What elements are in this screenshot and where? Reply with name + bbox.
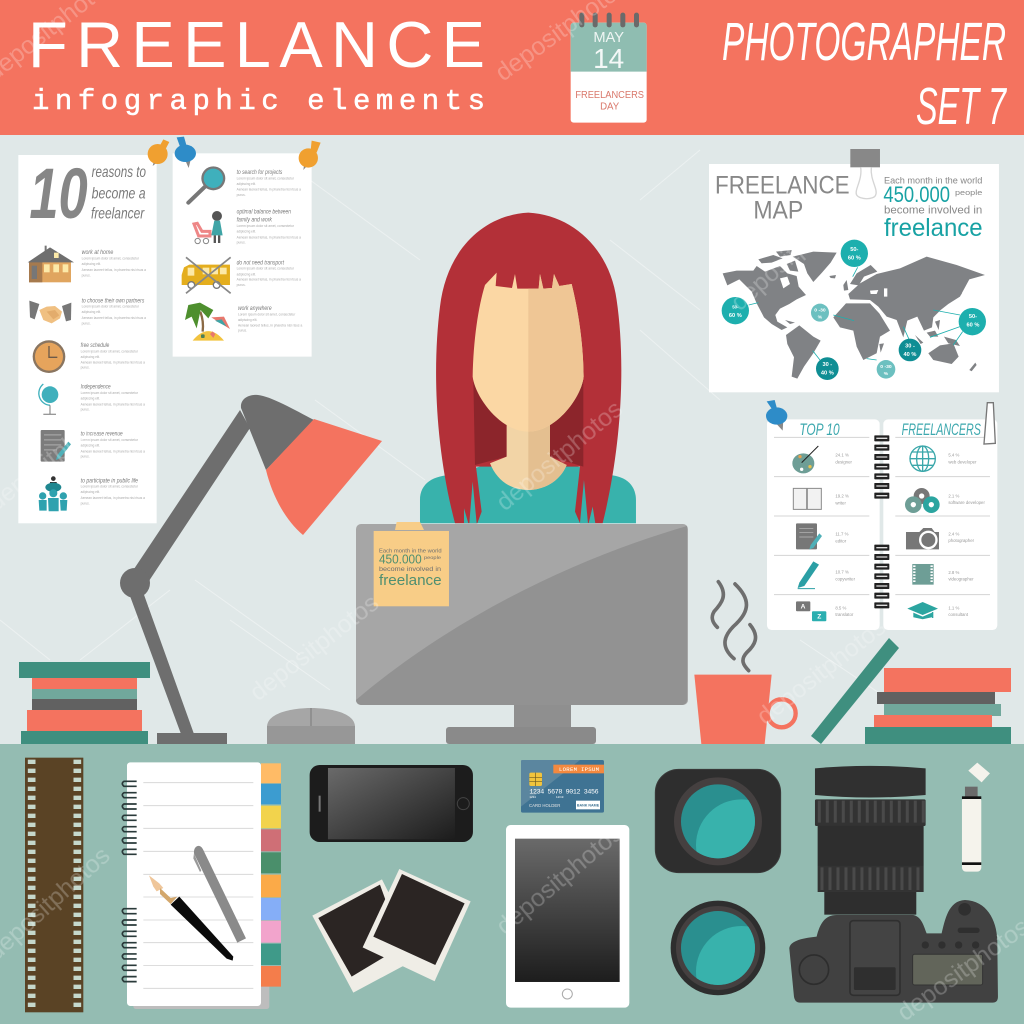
icon: palm island — [185, 303, 230, 341]
credit card: LOREM IPSUM — [559, 766, 600, 773]
desk lamp — [120, 395, 382, 745]
bubble: 50-60 west — [722, 297, 749, 324]
header banner — [0, 0, 1024, 136]
reason: work at home: Lorem ipsum dolor sit amet, consectetur — [82, 256, 140, 261]
reason: public life: purus. — [81, 500, 90, 505]
calendar icon: 14 — [593, 43, 624, 74]
bubble: 30-40 india: 30 - — [905, 343, 915, 349]
bubble: 50-60 east — [959, 308, 986, 335]
watermark text: depositphotos — [244, 589, 384, 707]
bubble: 30-40 brazil — [816, 357, 839, 380]
icon: handshake — [29, 301, 71, 323]
mug body — [694, 675, 772, 744]
ruler — [811, 638, 899, 744]
hair shadow — [473, 380, 583, 467]
reason: search projects: purus. — [237, 192, 246, 197]
calendar icon: DAY — [600, 101, 620, 112]
row: web developer: web developer — [948, 459, 977, 464]
row: writer: writer — [835, 500, 846, 505]
reason: free schedule: purus. — [81, 365, 90, 370]
reason: work at home: purus. — [82, 272, 91, 277]
notebook heading: freelancers: FREELANCERS — [902, 420, 981, 439]
reason: work at home — [82, 249, 147, 277]
neck — [490, 420, 567, 490]
reason: work anywhere: purus. — [238, 328, 247, 333]
icon: film — [912, 564, 934, 585]
reason: choose partners: to choose their own partners — [82, 297, 145, 304]
bubble: 0-30 south — [877, 360, 895, 379]
row: consultant — [948, 605, 969, 617]
usb stick — [962, 763, 990, 872]
icon: magnifier — [188, 166, 225, 203]
icon: photo camera — [906, 528, 939, 549]
icon: translate bubbles: Z — [817, 614, 821, 621]
reason: public life: Aenean laoreet tellus, in pharetra nisi risus a — [81, 495, 146, 500]
icon: graduation cap — [907, 602, 938, 619]
watermark text: depositphotos — [491, 395, 628, 517]
reason: independence: Aenean laoreet tellus, in pharetra nisi risus a — [81, 401, 146, 406]
sticky note — [374, 522, 449, 606]
sticky note: become involved in — [379, 566, 441, 573]
row: designer: designer — [835, 459, 852, 464]
reason: independence: purus. — [81, 407, 90, 412]
reason: public life: adipiscing elit. — [81, 489, 100, 494]
bubble: 50-60 east: 60 % — [967, 323, 979, 329]
computer mouse — [267, 708, 355, 744]
polaroid photos — [312, 869, 471, 993]
monitor — [356, 522, 688, 744]
desk items left — [25, 758, 473, 1012]
row: software developer: software developer — [948, 500, 985, 505]
film strip — [25, 758, 83, 1012]
map statistic: become involved in — [884, 204, 982, 216]
world map — [723, 250, 985, 379]
bubble: 30-40 india — [899, 339, 921, 361]
hair — [436, 213, 621, 523]
woman with red hair — [420, 213, 636, 523]
icon: globe — [39, 384, 58, 414]
pin: blue — [175, 137, 196, 168]
mug handle — [768, 699, 796, 727]
reason: increase revenue: Aenean laoreet tellus, in pharetra nisi risus a — [81, 448, 146, 453]
panel: 10 reasons — [18, 154, 157, 523]
reason: public life: Lorem ipsum dolor sit amet, consectetur — [81, 484, 139, 489]
coffee mug with steam — [694, 582, 796, 744]
row: translator: translator — [835, 612, 854, 617]
sticky note: freelance — [379, 573, 442, 589]
icon: open book — [793, 488, 821, 509]
map heading: FREELANCE — [715, 172, 850, 199]
bubble: 50-60 north: 50- — [850, 247, 859, 253]
reason: balance: family and work — [237, 217, 273, 224]
bubble: 0-30 south: % — [884, 371, 889, 377]
reason: choose partners — [82, 297, 147, 325]
row: editor: 11.7 % — [835, 532, 849, 537]
reason: increase revenue: to increase revenue — [81, 431, 123, 438]
row: photographer — [948, 531, 975, 543]
reason: transport: purus. — [237, 282, 246, 287]
reason: balance: adipiscing elit. — [237, 228, 256, 233]
row: consultant: consultant — [948, 612, 969, 617]
reason: choose partners: Lorem ipsum dolor sit amet, consectetur — [82, 304, 140, 309]
sticky note: Each month in the world — [379, 548, 442, 554]
icon: palette — [792, 446, 818, 473]
reason: choose partners: purus. — [82, 320, 91, 325]
bubble: 0-30 south: 0 -30 — [880, 364, 892, 370]
icon: people group — [39, 476, 67, 511]
reason: public life: to participate in public life — [81, 477, 138, 484]
map statistic: freelance — [884, 215, 983, 242]
icon: pencil — [798, 561, 819, 589]
credit card: BANK NAME — [577, 803, 600, 807]
row: web developer: 5.4 % — [948, 453, 960, 458]
row: translator — [835, 605, 854, 617]
dslr camera — [789, 766, 998, 1003]
icon: crossed bus — [182, 257, 231, 293]
reason: transport: do not need transport — [237, 259, 284, 266]
pin: orange right — [299, 141, 321, 170]
subtitle: infographic elements — [32, 85, 485, 118]
reason: free schedule — [81, 342, 146, 370]
panel heading — [91, 164, 146, 222]
icon: clock — [33, 340, 65, 373]
lamp shade — [241, 395, 314, 470]
row: software developer: 2.1 % — [948, 493, 960, 498]
panel heading: freelancer — [91, 205, 145, 222]
row: translator: 8.5 % — [835, 605, 847, 610]
icon: house — [28, 246, 74, 282]
reason: free schedule: free schedule — [81, 342, 110, 349]
reason: work anywhere: Lorem ipsum dolor sit amet, consectetur — [238, 311, 296, 316]
credit card: 12/19 — [556, 795, 564, 799]
right book stack — [865, 668, 1011, 744]
hair strand tips — [464, 480, 595, 523]
map heading: MAP — [753, 197, 803, 224]
icon: translate bubbles: A — [801, 604, 806, 611]
icon: web globe — [910, 446, 935, 471]
shirt — [420, 463, 636, 523]
reason: free schedule: Lorem ipsum dolor sit amet, consectetur — [81, 348, 139, 353]
bubble: 30-40 india: 40 % — [904, 352, 916, 358]
reason: transport: Aenean laoreet tellus, in pharetra nisi risus a — [237, 277, 302, 282]
row: videographer — [948, 570, 974, 582]
binder clip — [850, 149, 880, 199]
icon: notepad with pen — [41, 430, 71, 462]
calendar icon: FREELANCERS — [575, 90, 644, 101]
reason: search projects: Lorem ipsum dolor sit amet, consectetur — [237, 175, 295, 180]
credit card: CARD HOLDER — [529, 803, 561, 808]
reason: work anywhere: Aenean laoreet tellus, in pharetra nisi risus a — [238, 322, 303, 327]
reason: public life — [81, 477, 146, 505]
row: editor: editor — [835, 538, 847, 543]
ballpoint pen — [193, 846, 246, 943]
panel: freelance map — [709, 149, 999, 392]
reason: balance: Lorem ipsum dolor sit amet, consectetur — [237, 223, 295, 228]
watermark text: depositphotos — [491, 819, 628, 941]
reason: work at home: work at home — [82, 249, 114, 256]
paper clip — [984, 403, 995, 444]
big number 10: 10 — [29, 154, 88, 234]
map statistic: 450.000 — [883, 182, 950, 207]
lamp base — [157, 733, 227, 745]
row: videographer: videographer — [948, 577, 974, 582]
reason: work anywhere — [238, 305, 303, 333]
row: software developer — [948, 493, 985, 505]
icon: notepad — [796, 523, 822, 549]
reason: work anywhere: work anywhere — [238, 305, 272, 312]
lamp arm — [128, 410, 250, 734]
spiral notebook — [122, 762, 281, 1009]
row: copywriter: copywriter — [835, 576, 856, 581]
camera body — [789, 900, 998, 1003]
row: consultant: 1.1 % — [948, 605, 960, 610]
panel heading: reasons to — [92, 164, 146, 181]
reason: search projects: Aenean laoreet tellus, in pharetra nisi risus a — [237, 186, 302, 191]
reason: transport: Lorem ipsum dolor sit amet, consectetur — [237, 266, 295, 271]
icon: stroller and woman — [194, 211, 223, 244]
panel heading: become a — [92, 185, 146, 202]
bubble: 50-60 west: 60 % — [729, 313, 742, 319]
camera lens — [815, 766, 926, 797]
pin: blue notebook — [766, 400, 787, 431]
row: copywriter: 10.7 % — [835, 570, 849, 575]
reason: independence — [81, 384, 146, 412]
bubble: 50-60 east: 50- — [969, 314, 977, 320]
notebook heading: top 10: TOP 10 — [799, 420, 840, 439]
face — [473, 273, 584, 432]
reason: work at home: Aenean laoreet tellus, in pharetra nisi risus a — [82, 267, 147, 272]
reason: free schedule: adipiscing elit. — [81, 354, 100, 359]
reason: work at home: adipiscing elit. — [82, 261, 101, 266]
bubble: 0-30 atlantic: % — [818, 314, 823, 320]
reason: search projects: adipiscing elit. — [237, 181, 256, 186]
reason: increase revenue: Lorem ipsum dolor sit amet, consectetur — [81, 437, 139, 442]
reason: independence: adipiscing elit. — [81, 395, 100, 400]
sticky note: people — [424, 555, 441, 560]
bubble: 0-30 atlantic: 0 -30 — [814, 308, 826, 314]
panel: more reasons — [148, 137, 321, 357]
monitor back — [356, 524, 688, 705]
bubble: 50-60 north: 60 % — [848, 256, 861, 262]
sticky note: 450.000 — [379, 553, 422, 567]
desk items right — [506, 760, 998, 1017]
credit card: 1234 5678 9012 3456 — [529, 788, 599, 796]
icon: translate bubbles — [796, 601, 826, 621]
map connector lines — [749, 267, 963, 360]
reason: search projects: to search for projects — [237, 169, 283, 176]
row: photographer: photographer — [948, 538, 975, 543]
watermark text: depositphotos — [725, 191, 860, 316]
reason: choose partners: Aenean laoreet tellus, in pharetra nisi risus a — [82, 315, 147, 320]
smartphone — [310, 765, 473, 842]
row: web developer — [948, 453, 977, 464]
bubble: 0-30 atlantic — [811, 304, 829, 322]
reason: search projects — [237, 169, 302, 197]
row: writer: 19.2 % — [835, 494, 849, 499]
bubble: 30-40 brazil: 30 - — [822, 362, 832, 368]
reason: free schedule: Aenean laoreet tellus, in pharetra nisi risus a — [81, 359, 146, 364]
reason: increase revenue: purus. — [81, 454, 90, 459]
row: videographer: 2.8 % — [948, 570, 960, 575]
title: FREELANCE — [28, 8, 485, 81]
tablet — [506, 825, 629, 1008]
reason: balance: Aenean laoreet tellus, in pharetra nisi risus a — [237, 234, 302, 239]
row: editor — [835, 532, 849, 543]
watermark text: depositphotos — [751, 613, 891, 731]
reason: increase revenue: adipiscing elit. — [81, 442, 100, 447]
row: designer: 24.1 % — [835, 453, 849, 458]
map statistic — [883, 175, 983, 242]
panel: top 10 freelancers notebook — [766, 400, 997, 630]
reason: balance — [237, 208, 302, 245]
row: writer — [835, 494, 849, 505]
reason: transport: adipiscing elit. — [237, 271, 256, 276]
row: photographer: 2.4 % — [948, 531, 960, 536]
bubble: 30-40 brazil: 40 % — [821, 371, 834, 377]
lens hood — [654, 768, 782, 874]
monitor stand — [514, 704, 571, 729]
map heading — [715, 172, 850, 224]
reason: choose partners: adipiscing elit. — [82, 309, 101, 314]
reason: transport — [237, 259, 302, 287]
lens cap — [670, 900, 766, 996]
credit card: 1234 — [529, 795, 536, 799]
fountain pen — [149, 875, 233, 961]
map statistic: people — [955, 188, 982, 197]
spiral binding — [874, 435, 889, 608]
row: designer — [835, 453, 852, 464]
reason: balance: optimal balance between — [237, 208, 291, 215]
pin: orange left — [148, 139, 169, 166]
bubble: 50-60 north — [841, 240, 868, 267]
reason: increase revenue — [81, 431, 146, 459]
credit card — [521, 760, 604, 813]
desk surface — [0, 744, 1024, 1024]
reason: independence: Lorem ipsum dolor sit amet, consectetur — [81, 390, 139, 395]
bubble: 50-60 west: 50- — [732, 304, 739, 309]
steam — [712, 582, 756, 671]
icon: software discs — [905, 488, 940, 513]
row: copywriter — [835, 570, 856, 581]
calendar icon — [571, 13, 647, 123]
reason: balance: purus. — [237, 240, 246, 245]
reason: work anywhere: adipiscing elit. — [238, 317, 257, 322]
calendar icon: MAY — [593, 30, 624, 46]
left book stack — [19, 662, 150, 744]
reason: independence: Independence — [81, 384, 111, 391]
map statistic: Each month in the world — [884, 175, 982, 185]
